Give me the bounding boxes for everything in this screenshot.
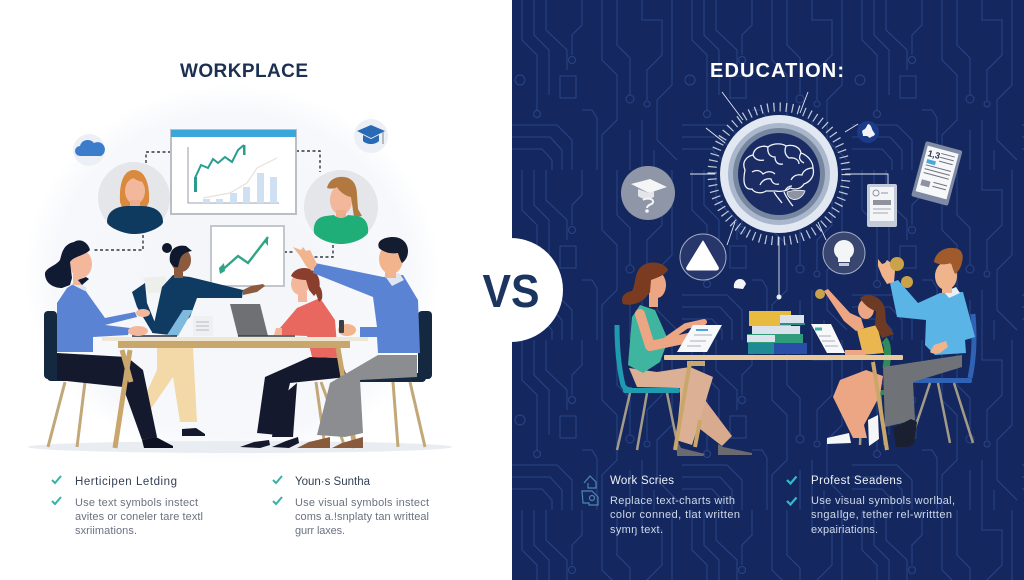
chair: right	[316, 311, 432, 447]
check mark	[787, 498, 796, 504]
icon: small bell badge	[857, 121, 879, 143]
dashed connectors	[93, 151, 333, 257]
VS badge: VS	[482, 265, 540, 317]
panel: workplace background	[0, 0, 512, 580]
soft backdrop behind workplace scene	[24, 85, 440, 465]
chair: education right	[910, 314, 974, 443]
checklist: education column two	[787, 475, 955, 536]
table accessories: laptops and papers	[132, 304, 295, 336]
item body	[295, 497, 429, 537]
floor shadow	[28, 441, 452, 453]
person: child with curly hair	[824, 289, 894, 446]
item heading: Work Scries	[610, 475, 674, 487]
check mark	[52, 476, 61, 483]
item body	[610, 495, 740, 536]
item body: color conned, tlat written	[610, 509, 740, 521]
chart: small trend board	[211, 226, 284, 286]
icon: small white marker	[734, 279, 746, 289]
person: man in sky-blue shirt	[878, 248, 975, 447]
person: standing woman in navy	[132, 243, 265, 436]
checklist: workplace column one	[52, 476, 203, 537]
title: education: EDUCATION:	[710, 60, 844, 82]
item heading: Youn·s Suntha	[295, 476, 371, 488]
item body: coms a.!snplaty tan writteal	[295, 511, 429, 523]
check mark	[52, 497, 61, 504]
connector end dot	[776, 294, 782, 300]
education: radial ticks and connector lines	[690, 92, 888, 297]
coins	[815, 257, 913, 299]
icon: tilted document tablet: 1,3	[927, 148, 941, 161]
paper: child's document	[811, 324, 845, 353]
icon: cloud badge	[73, 134, 105, 166]
item body: symŋ text.	[610, 524, 663, 536]
chair: education left	[617, 325, 680, 450]
icon: light bulb badge	[823, 232, 865, 274]
item body: avites or coneler tare textl	[75, 511, 203, 523]
panel: education background	[512, 0, 1024, 580]
table: workplace	[102, 337, 368, 448]
icon: brain in rings	[720, 115, 838, 233]
item heading: Herticipen Letding	[75, 476, 177, 488]
icon: small tablet	[867, 184, 897, 227]
title: workplace: WORKPLACE	[180, 61, 308, 82]
item body: Use visual symbols instect	[295, 497, 429, 509]
person: woman in teal top	[622, 263, 752, 456]
check mark	[273, 497, 282, 504]
check mark	[273, 476, 282, 483]
icon: cap with question mark	[621, 166, 675, 220]
item body	[811, 495, 955, 536]
item body: Use visual symbols worlbal,	[811, 495, 955, 507]
checklist: education column one	[582, 475, 740, 536]
person: seated woman in coral	[240, 268, 347, 448]
item body	[75, 497, 203, 537]
table: education	[664, 355, 903, 450]
item body: Replace text-charts with	[610, 495, 735, 507]
icon: triangle badge	[680, 234, 726, 280]
chair: education child	[850, 340, 888, 445]
chart: large monitor with line and bars	[171, 130, 296, 214]
icon: graduation cap badge	[354, 119, 388, 153]
books stack	[747, 311, 807, 354]
check mark	[787, 476, 796, 484]
checklist: workplace column two	[273, 476, 429, 537]
item body: sngaIlge, tether rel-writtten	[811, 509, 952, 521]
portrait: man in green shirt	[304, 170, 378, 244]
person: standing man in blue sweater	[293, 237, 420, 448]
icon: tilted document tablet	[911, 141, 963, 206]
paper: woman's document	[677, 325, 722, 352]
chair: left	[44, 311, 113, 447]
item body: expairiations.	[811, 524, 878, 536]
item body: sxriimations.	[75, 525, 137, 537]
item body: gurr laxes.	[295, 525, 345, 537]
VS badge	[459, 238, 563, 342]
portrait: woman with orange hair	[98, 162, 170, 234]
item heading: Profest Seadens	[811, 475, 902, 487]
icon: outline symbols	[582, 476, 598, 505]
item body: Use text symbols instect	[75, 497, 198, 509]
person: seated woman in blue, left	[45, 240, 173, 448]
